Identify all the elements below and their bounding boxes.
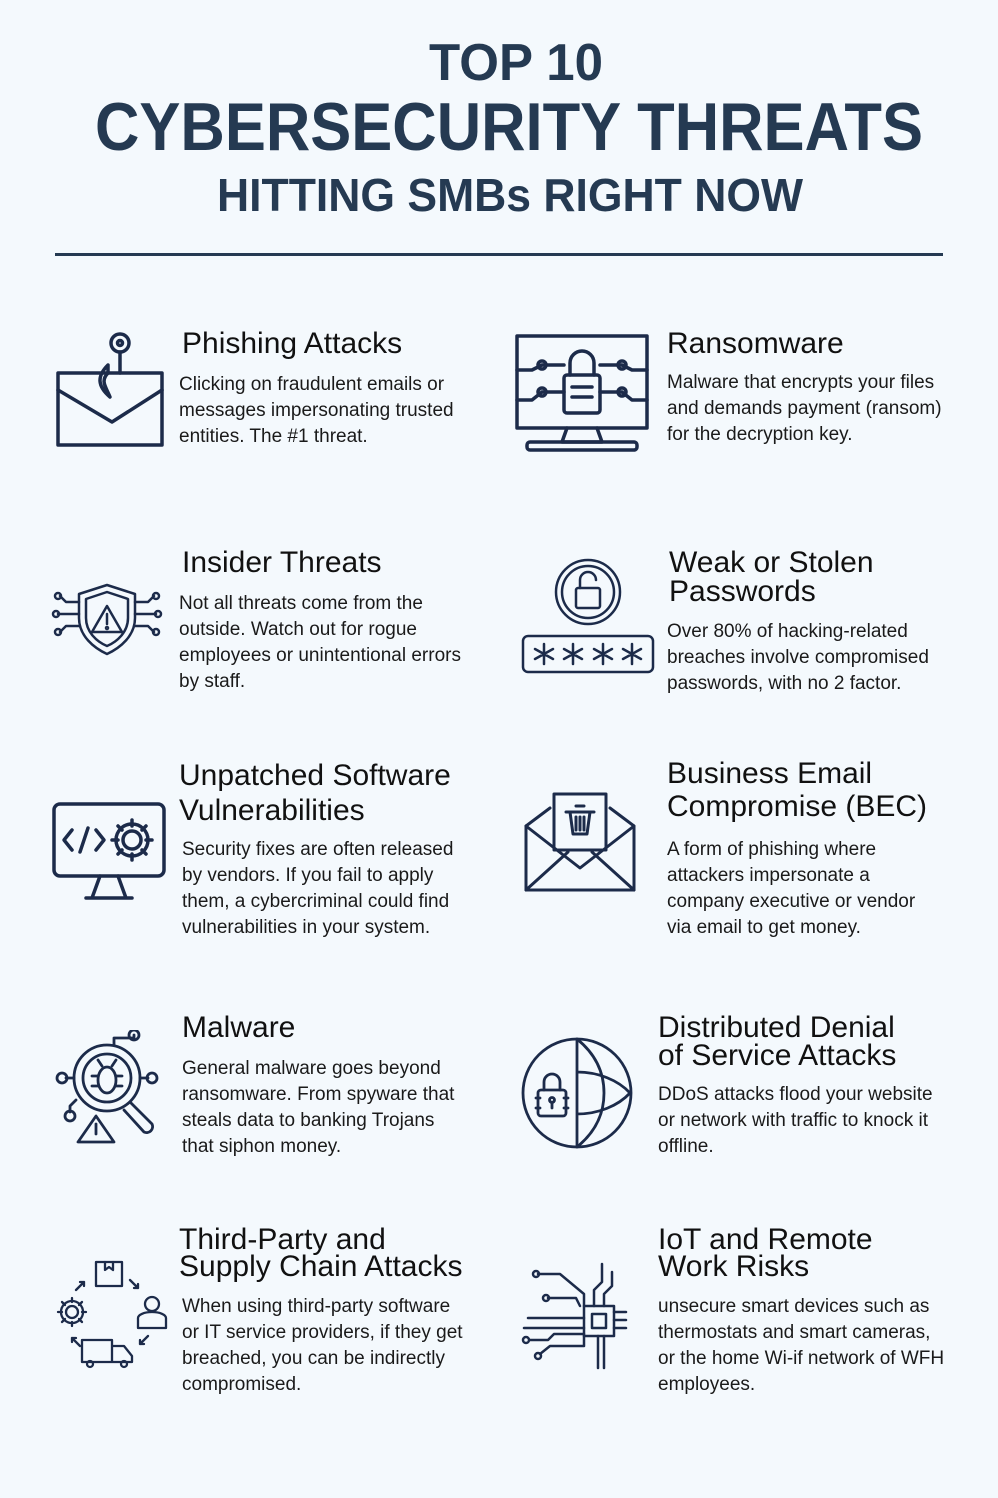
text: DDoS: offline. (658, 1136, 714, 1157)
icon: phishing (56, 332, 164, 447)
icon: malware (56, 1030, 158, 1144)
text: IoT: thermostats and smart cameras, (658, 1322, 930, 1343)
heading: supply chain: Supply Chain Attacks (179, 1250, 462, 1283)
heading: insider: Insider Threats (182, 546, 382, 579)
heading: BEC: Business Email (667, 757, 872, 790)
text: passwords (667, 621, 929, 694)
text: malware: steals data to banking Trojans (182, 1110, 434, 1131)
text: IoT: unsecure smart devices such as (658, 1296, 929, 1317)
text: passwords: Over 80% of hacking-related (667, 621, 908, 642)
heading: IoT (658, 1223, 873, 1283)
heading: unpatched (179, 759, 451, 827)
heading: passwords: Weak or Stolen (669, 546, 874, 579)
text: malware: ransomware. From spyware that (182, 1084, 454, 1105)
icon: insider (52, 584, 162, 656)
text: passwords: passwords, with no 2 factor. (667, 673, 901, 694)
text: DDoS (658, 1084, 933, 1157)
text: malware: General malware goes beyond (182, 1058, 441, 1079)
heading: unpatched: Vulnerabilities (179, 794, 365, 827)
heading: malware: Malware (182, 1011, 295, 1044)
text: IoT: or the home Wi-if network of WFH (658, 1348, 944, 1369)
text: unpatched: vulnerabilities in your system. (182, 917, 430, 938)
text: ransomware: Malware that encrypts your files (667, 372, 934, 393)
heading: phishing: Phishing Attacks (182, 327, 402, 360)
heading: supply chain (179, 1223, 462, 1283)
text: unpatched: by vendors. If you fail to apply (182, 865, 433, 886)
text: insider (179, 593, 461, 692)
heading: DDoS: Distributed Denial (658, 1011, 895, 1044)
text: BEC: attackers impersonate a (667, 865, 870, 886)
text: insider: Not all threats come from the (179, 593, 423, 614)
text: BEC: via email to get money. (667, 917, 861, 938)
title: HITTING SMBs RIGHT NOW (217, 169, 804, 221)
text: phishing: messages impersonating trusted (179, 400, 454, 421)
text: DDoS: DDoS attacks flood your website (658, 1084, 933, 1105)
text: BEC: company executive or vendor (667, 891, 915, 912)
heading: supply chain: Third-Party and (179, 1223, 386, 1256)
text: ransomware: and demands payment (ransom) (667, 398, 942, 419)
text: ransomware (667, 372, 942, 445)
title: TOP 10 (429, 34, 603, 92)
icon: passwords (522, 558, 654, 674)
heading: ransomware: Ransomware (667, 327, 844, 360)
text: insider: employees or unintentional errors (179, 645, 461, 666)
heading: IoT: IoT and Remote (658, 1223, 873, 1256)
text: BEC (667, 839, 915, 938)
text: supply chain: compromised. (182, 1374, 301, 1395)
heading: IoT: Work Risks (658, 1250, 809, 1283)
icon: unpatched (52, 802, 166, 900)
text: unpatched: them, a cybercriminal could find (182, 891, 449, 912)
heading: BEC (667, 757, 927, 823)
text: malware: that siphon money. (182, 1136, 341, 1157)
text: supply chain: When using third-party software (182, 1296, 450, 1317)
text: DDoS: or network with traffic to knock it (658, 1110, 928, 1131)
icon: ransomware (515, 334, 649, 452)
heading: DDoS (658, 1011, 896, 1072)
icon: IoT (522, 1262, 628, 1370)
icon: BEC (524, 792, 636, 892)
heading: passwords: Passwords (669, 575, 816, 608)
icon: supply chain (56, 1260, 168, 1368)
heading: BEC: Compromise (BEC) (667, 790, 927, 823)
title (95, 34, 923, 221)
text: insider: outside. Watch out for rogue (179, 619, 417, 640)
text: malware (182, 1058, 454, 1157)
text: insider: by staff. (179, 671, 245, 692)
text: BEC: A form of phishing where (667, 839, 876, 860)
text: IoT: employees. (658, 1374, 755, 1395)
text: unpatched: Security fixes are often released (182, 839, 453, 860)
heading: passwords (669, 546, 874, 608)
text: supply chain: breached, you can be indirectly (182, 1348, 445, 1369)
title: CYBERSECURITY THREATS (95, 89, 923, 165)
heading: DDoS: of Service Attacks (658, 1039, 896, 1072)
icon: DDoS (522, 1038, 632, 1148)
text: unpatched (182, 839, 453, 938)
text: supply chain (182, 1296, 463, 1395)
text: passwords: breaches involve compromised (667, 647, 929, 668)
text: phishing: Clicking on fraudulent emails or (179, 374, 444, 395)
heading: unpatched: Unpatched Software (179, 759, 451, 792)
text: phishing (179, 374, 454, 447)
text: phishing: entities. The #1 threat. (179, 426, 368, 447)
text: supply chain: or IT service providers, if they get (182, 1322, 463, 1343)
text: ransomware: for the decryption key. (667, 424, 853, 445)
text: IoT (658, 1296, 944, 1395)
